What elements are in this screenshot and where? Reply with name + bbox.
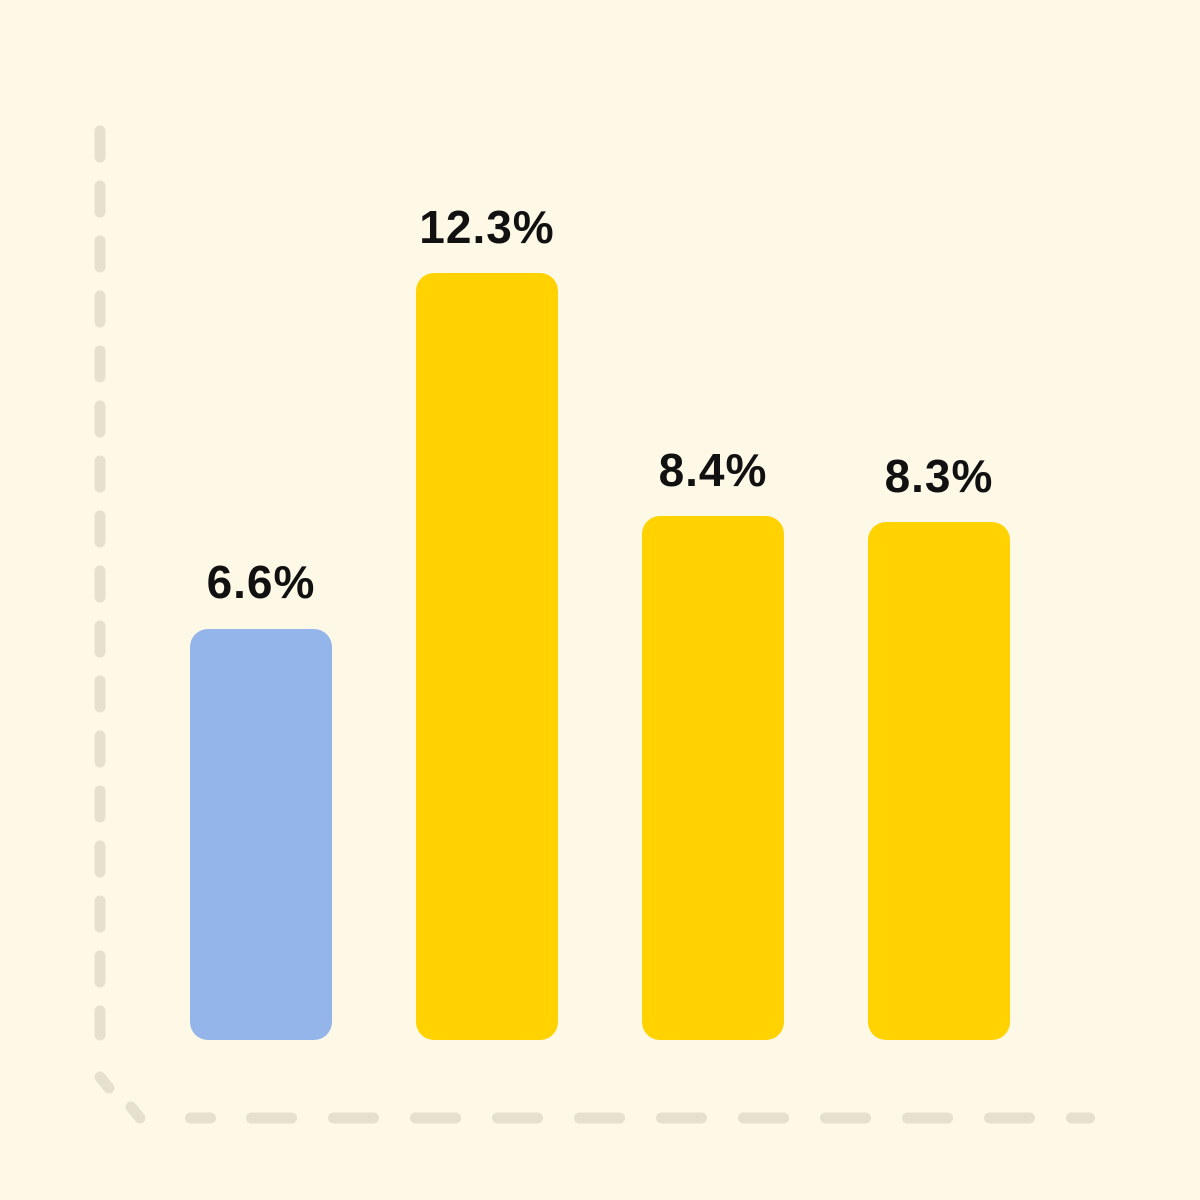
bar: 8.3%: 8.3%: [885, 450, 993, 502]
bar: 8.4%: 8.4%: [659, 444, 767, 496]
bar: 8.4%: [642, 444, 784, 1040]
bar: 12.3%: [416, 201, 558, 1040]
bar: 6.6%: 6.6%: [207, 556, 315, 608]
bar: 8.3%: [868, 450, 1010, 1040]
bar: 12.3%: 12.3%: [419, 201, 555, 253]
bar: 6.6%: [190, 556, 332, 1040]
